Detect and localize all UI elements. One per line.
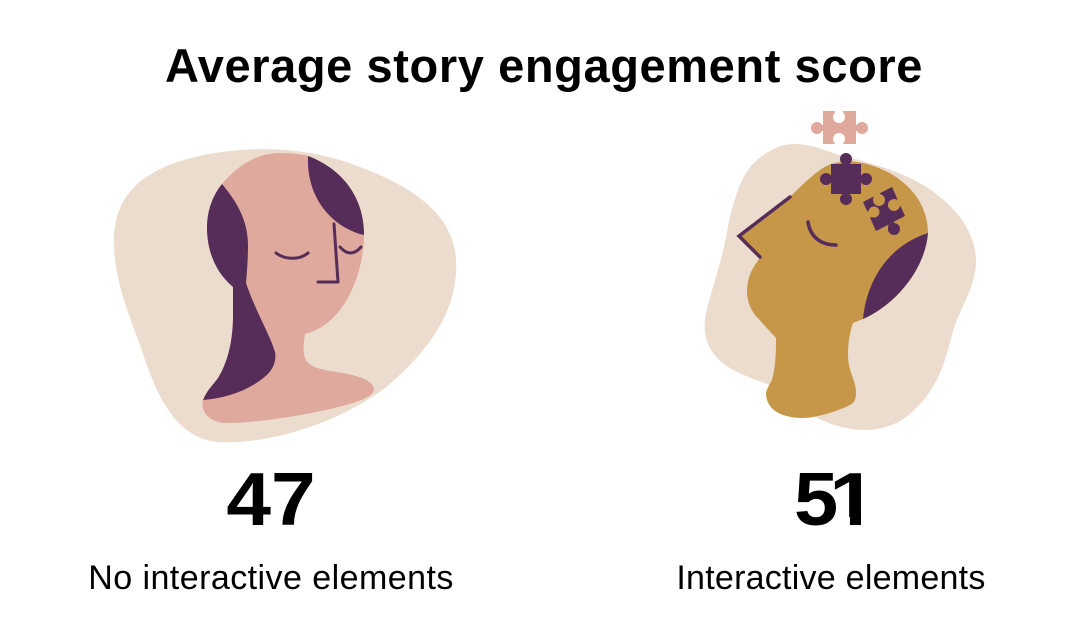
- right score: 1: [829, 457, 877, 541]
- icon: pink puzzle piece: [811, 110, 868, 145]
- left score: 47: [226, 457, 316, 541]
- icon: head without puzzle pieces: [114, 149, 456, 442]
- left label: No interactive elements: [88, 559, 454, 597]
- icon: dark puzzle piece: [820, 153, 872, 205]
- right label: Interactive elements: [676, 559, 986, 597]
- icon: head with puzzle pieces: [705, 110, 976, 430]
- title: Average story engagement score: [165, 39, 923, 92]
- right score: 5: [794, 457, 838, 541]
- icon: tilted puzzle piece: [863, 187, 905, 235]
- right score: [794, 457, 861, 541]
